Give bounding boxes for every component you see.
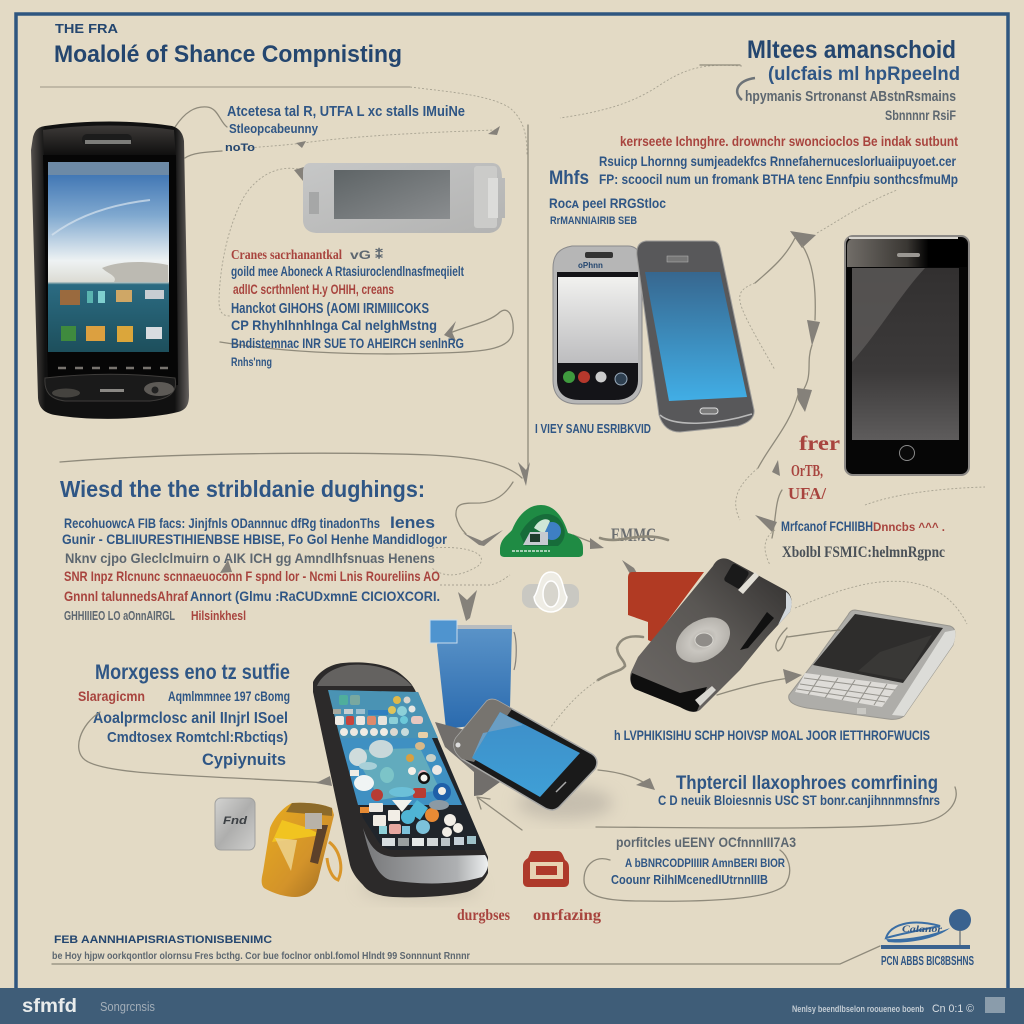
phone back view <box>630 558 792 712</box>
stand behind tilted phone <box>435 722 500 796</box>
footnote block: be Hoy hjpw oorkqontlor olornsu Fres bcthg. Cor bue foclnor onbl.fomol Hlndt 99 Sonnnunt Rnnnr <box>52 951 470 962</box>
callout: red labels <box>788 431 840 503</box>
text block: middle left section: Ienes <box>390 513 435 532</box>
footer subtitle: Songrcnsis <box>100 999 155 1014</box>
title block <box>54 21 402 68</box>
connector lines: centre <box>220 482 668 621</box>
text block: top left heading lines: Atcetesa tal R, UTFA L xc stalls IMuiNe <box>227 103 465 120</box>
red label <box>457 907 601 924</box>
app icons <box>333 695 476 846</box>
text block: top right: Mhfs <box>549 168 589 189</box>
lens disc <box>668 608 738 672</box>
text block: left mid paragraph: Bndistemnac INR SUE TO AHEIRCH senlnRG <box>231 335 464 351</box>
body <box>789 610 955 719</box>
home button <box>900 446 914 460</box>
text block: right captions: Dnncbs ^^^ . <box>873 520 945 534</box>
logo <box>881 909 974 968</box>
side notch and rim <box>740 612 774 650</box>
text block: middle left section <box>60 476 447 623</box>
footnote block <box>52 934 880 964</box>
footer logo: sfmfd <box>22 996 77 1017</box>
text block: left mid paragraph: vG ⁑ <box>350 247 383 262</box>
arrow: lower centre <box>477 797 522 830</box>
text block: small callout <box>584 834 796 901</box>
heading: Wiesd the the stribldanie dughings: <box>60 476 425 502</box>
text block: left mid paragraph: adlIC scrthnlent H.y OHIH, creans <box>233 281 394 297</box>
text block: lower right <box>596 773 956 828</box>
callout: red labels: OrTB, <box>791 461 823 480</box>
red panel behind phone back <box>628 572 704 642</box>
text block: left mid paragraph: Hanckot GIHOHS (AOMI IRIMIIICOKS <box>231 300 429 317</box>
footer bar <box>0 988 1024 1024</box>
connector lines: upper left <box>60 87 530 486</box>
text block: middle left section: Gnnnl talunnedsAhraf <box>64 588 188 604</box>
text block: left mid paragraph: Rnhs'nng <box>231 355 272 369</box>
text block: top right: Rocᴀ peeI RRGStloc <box>549 195 666 211</box>
main title: Moalolé of Shance Compnisting <box>54 41 402 68</box>
text block: top right: Sbnnnnr RsiF <box>885 107 956 123</box>
phone 1: touchscreen smartphone <box>31 122 189 419</box>
screen <box>334 170 450 219</box>
blue screen phone <box>637 241 754 432</box>
text block: top right: (ulcfais ml hpRpeelnd <box>768 64 960 85</box>
screen <box>328 690 485 850</box>
label: EMMC: EMMC <box>611 525 656 546</box>
text block: middle left section: RecohuowcA FIB facs: Jinjfnls ODannnuc dfRg tinadonThs <box>64 515 380 531</box>
earpiece <box>82 134 132 145</box>
keyboard <box>795 673 898 707</box>
body <box>845 236 969 475</box>
text block: right captions <box>781 518 945 561</box>
keyboard device <box>789 610 955 719</box>
text block: middle left section: Annort (Glmu :RaCUDxmnE CICIOXCORI. <box>190 588 440 604</box>
icon: grey pill with white rings <box>522 572 579 612</box>
silver band <box>363 828 488 883</box>
red label: durgbses <box>457 907 510 924</box>
white screen phone: oPhnn <box>578 261 603 270</box>
text block: right captions: Mrfcanof FCHIIBH <box>781 518 873 534</box>
connectors: phone back and keyboard <box>550 581 967 728</box>
text block: small callout: Coounr RiIhIMcenedIUtrnnIIIB <box>611 872 768 887</box>
QR mark <box>985 997 1005 1013</box>
speaker <box>897 253 920 257</box>
text block: lower right: Thptercil Ilaxophroes comrfining <box>676 773 938 794</box>
arrow: subheading to large phone <box>79 712 332 786</box>
footer credits: Nenlsy beendlbselon rooueneo boenb <box>792 1004 924 1015</box>
text block: subheading right aligned: Cypiynuits <box>202 750 286 769</box>
caption: I VIEY SANU ESRIBKVID <box>535 421 651 436</box>
icon: gold device <box>262 803 341 897</box>
text block: subheading right aligned: Aoalprmclosc anil IInjrl ISoel <box>93 710 288 727</box>
icon: green cloud with globe <box>500 505 583 557</box>
body <box>31 122 189 419</box>
blue document card <box>430 620 516 729</box>
text block: small callout: porfitcles uEENY OCfnnnIII7A3 <box>616 834 796 850</box>
text block: top right: Mltees amanschoid <box>747 36 956 64</box>
text block: left mid paragraph: goild mee Aboneck A Rtasiuroclendlnasfmeqiielt <box>231 263 464 279</box>
text block: subheading right aligned: Slaragicmn <box>78 688 145 704</box>
text block: lower right: C D neuik Bloiesnnis USC ST bonr.canjihnnmnsfnrs <box>658 792 940 808</box>
icon: silver chip: Fnd <box>223 815 247 827</box>
callout: red labels: UFA/ <box>788 484 826 503</box>
eyebrow: THE FRA <box>55 21 119 36</box>
icon: red box <box>523 851 569 887</box>
white screen phone <box>553 246 642 404</box>
text block: middle left section: GHHIIIEO LO aOnnAIRGL <box>64 608 175 623</box>
text block: top right: hpymanis Srtronanst ABstnRsmains <box>745 88 956 105</box>
body <box>303 163 505 233</box>
text block: top right <box>549 36 960 227</box>
text block: left mid paragraph <box>231 247 464 369</box>
logo: PCN ABBS BIC8BSHNS <box>881 953 974 968</box>
tilted blue phone <box>454 700 613 819</box>
text block: small callout: A bBNRCODPIIIIR AmnBERI BIOR <box>625 856 785 870</box>
text block: right captions: Xbolbl FSMIC:helmnRgpnc <box>782 544 945 561</box>
phones pair: white and blue screens <box>535 241 754 436</box>
text block: subheading right aligned: Aqmlmmnee 197 cBomg <box>168 688 290 704</box>
text block: top left heading lines: noTo <box>225 142 255 154</box>
tablet device <box>845 236 969 475</box>
text block: subheading right aligned <box>78 661 290 769</box>
red label: onrfazing <box>533 907 601 924</box>
text block: middle left section: Nknv cjpo Gleclclmuirn o AIK ICH gg Amndlhfsnuas Henens <box>65 550 435 566</box>
logo: Calanor <box>902 924 943 934</box>
screen <box>852 268 959 440</box>
text block: middle left section: Gunir - CBLIIURESTIHIENBSE HBISE, Fo Gol Henhe Mandidlogor <box>62 531 447 547</box>
camera <box>723 563 750 590</box>
text block: top right: FP: scoocil num un fromank BTHA tenc Ennfpiu sonthcsfmuMp <box>599 171 958 187</box>
text block: subheading right aligned: Morxgess eno tz sutfie <box>95 661 290 684</box>
icon: silver chip <box>215 798 255 850</box>
footnote block: FEB AANNHIAPISRIASTIONISBENIMC <box>54 934 272 946</box>
text block: top left heading lines <box>225 103 465 154</box>
arrow: tilted phone to caption <box>598 770 655 790</box>
device: silver landscape handheld <box>303 163 505 233</box>
app icons <box>60 290 164 342</box>
text block: middle left section: SNR Inpz Rlcnunc scnnaeuoconn F spnd lor - Ncmi Lnis Roureliins AO <box>64 568 440 584</box>
screen <box>813 614 943 683</box>
text block: top right: kerrseete Ichnghre. drownchr swoncioclos Be indak sutbunt <box>620 133 958 149</box>
caption under devices: h LVPHIKISIHU SCHP HOIVSP MOAL JOOR IETTHROFWUCIS <box>614 727 930 743</box>
text block: top right: RrMANNIAIRIB SEB <box>550 215 637 227</box>
text block: top left heading lines: Stleopcabeunny <box>229 121 319 136</box>
connector lines: right column <box>560 65 985 565</box>
text block: left mid paragraph: CP RhyhIhnhlnga Cal nelghMstng <box>231 317 437 333</box>
status strip <box>58 367 170 369</box>
text block: top right: Rsuicp Lhornng sumjeadekfcs Rnnefahernuceslorluaiipuyoet.cer <box>599 153 956 169</box>
footer bar: Cn 0:1 © <box>932 1003 974 1015</box>
callout: red labels: frer <box>799 431 840 455</box>
large phone with colourful app screen <box>313 662 488 900</box>
text block: subheading right aligned: Cmdtosex Romtchl:Rbctiqs) <box>107 729 288 746</box>
screen <box>48 162 169 352</box>
text block: left mid paragraph: Cranes sacrhanantkal <box>231 248 342 263</box>
button bar <box>45 374 176 401</box>
body <box>360 876 480 900</box>
gloss base <box>631 673 707 712</box>
text block: middle left section: Hilsinkhesl <box>191 608 246 623</box>
